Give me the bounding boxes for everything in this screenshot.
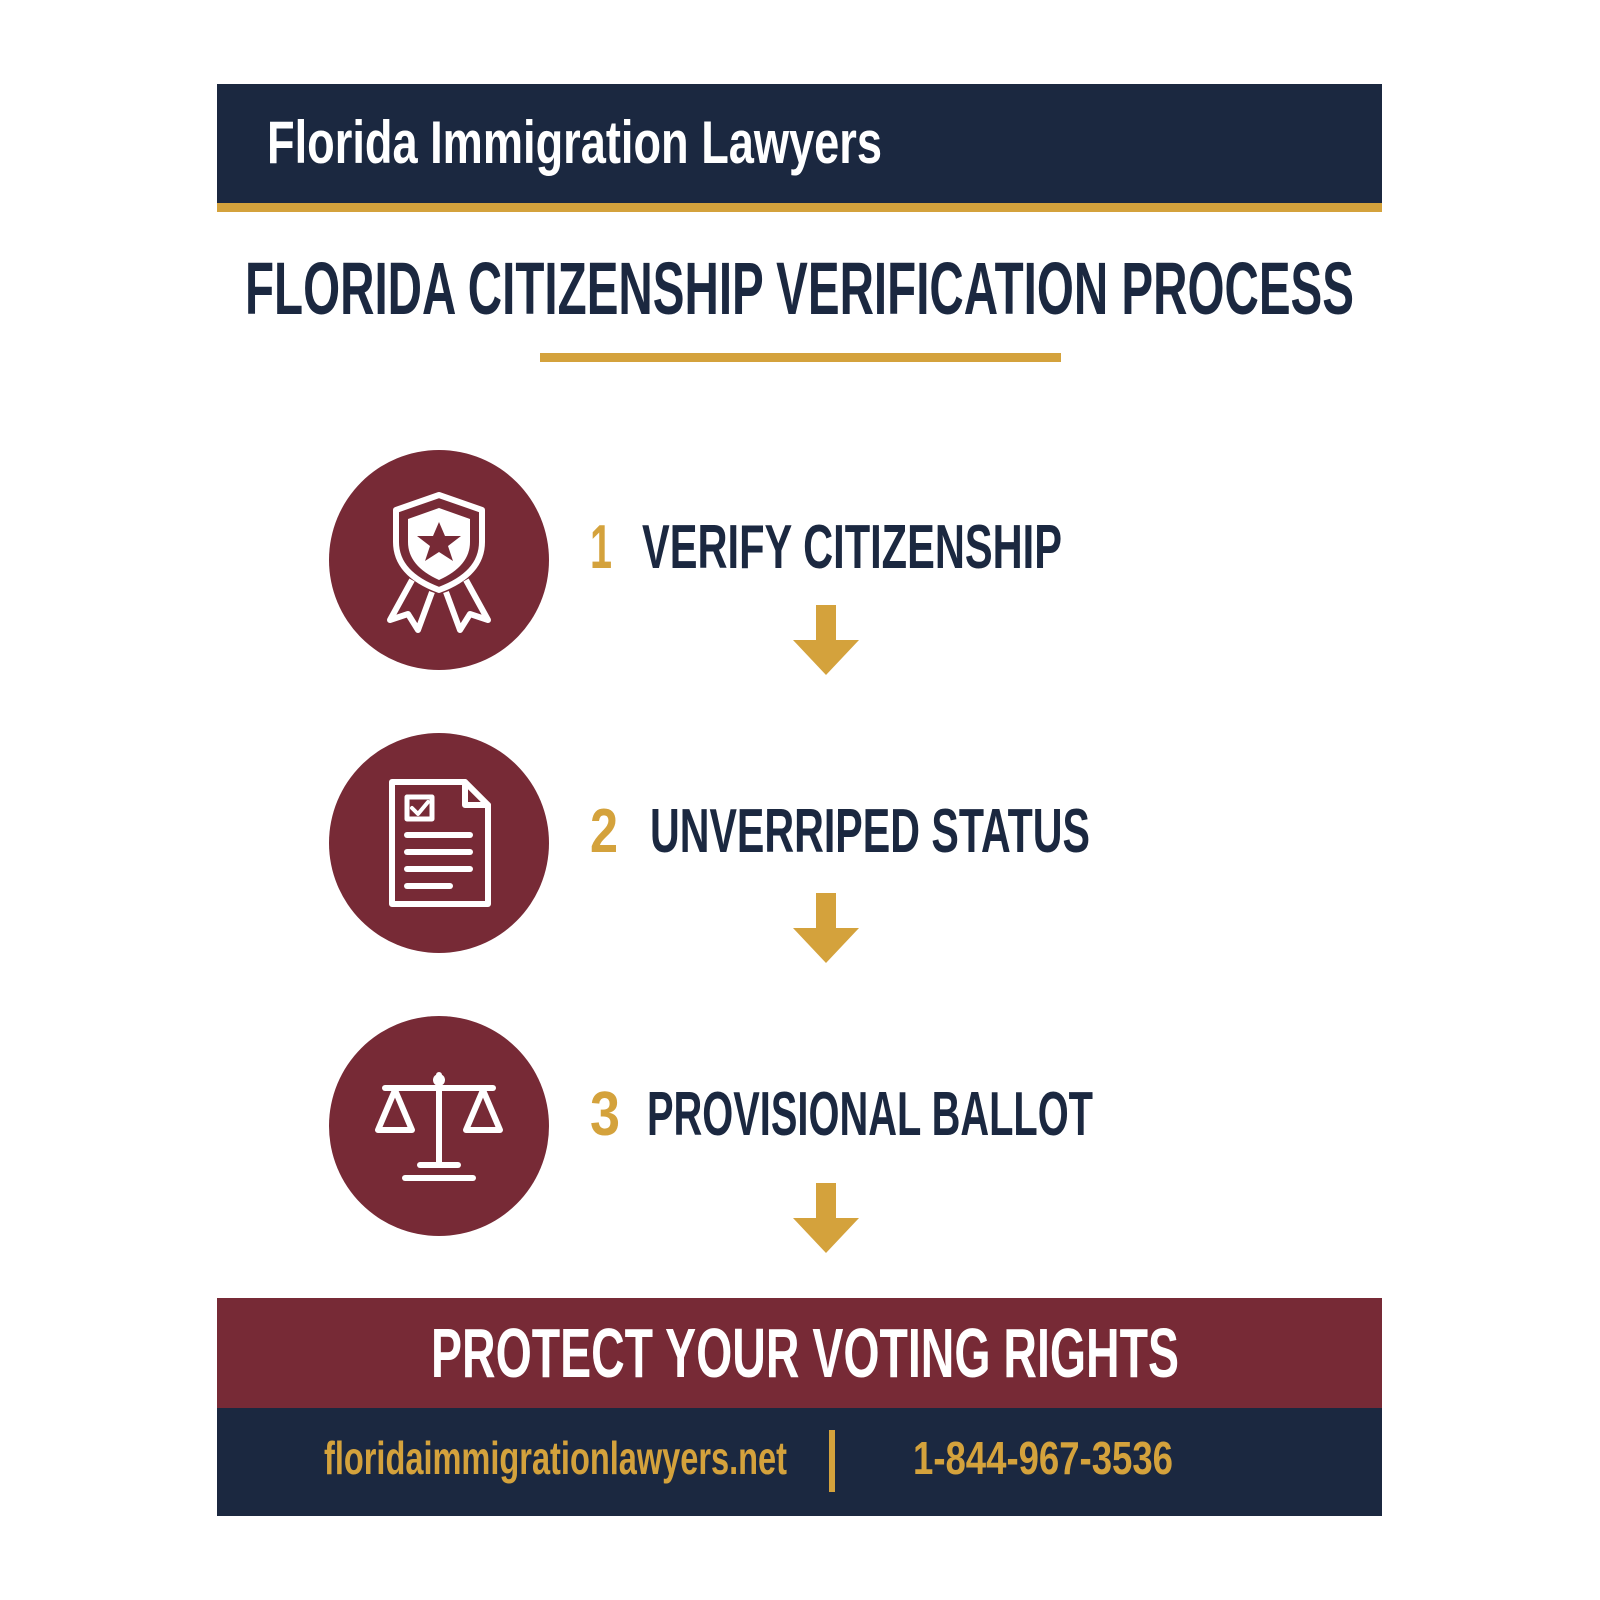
icon: document: [329, 733, 549, 953]
step 2: [329, 733, 1090, 953]
header text: Florida Immigration Lawyers: [267, 109, 882, 176]
arrow 3: [793, 1183, 859, 1253]
step 3: [329, 1016, 1093, 1236]
step 1 label: [590, 513, 1062, 582]
step 1: [329, 450, 1062, 670]
step 1 label: 1: [590, 513, 612, 582]
step 3 label: 3: [590, 1080, 620, 1149]
icon: scales of justice: [329, 1016, 549, 1236]
step 3 label: PROVISIONAL BALLOT: [647, 1080, 1093, 1149]
website: floridaimmigrationlawyers.net: [324, 1432, 787, 1484]
title underline: [540, 353, 1061, 362]
phone: 1-844-967-3536: [913, 1432, 1173, 1484]
call to action band: PROTECT YOUR VOTING RIGHTS: [431, 1314, 1179, 1392]
step 2 label: UNVERRIPED STATUS: [650, 797, 1090, 866]
step 1 label: VERIFY CITIZENSHIP: [642, 513, 1062, 582]
footer contact bar: [217, 1408, 1382, 1516]
step 3 label: [590, 1080, 1093, 1149]
call to action band: [217, 1298, 1382, 1409]
arrow 2: [793, 893, 859, 963]
arrow 1: [793, 605, 859, 675]
header bar: [217, 84, 1382, 212]
step 2 label: 2: [590, 797, 618, 866]
step 2 label: [590, 797, 1090, 866]
icon: award shield: [329, 450, 549, 670]
